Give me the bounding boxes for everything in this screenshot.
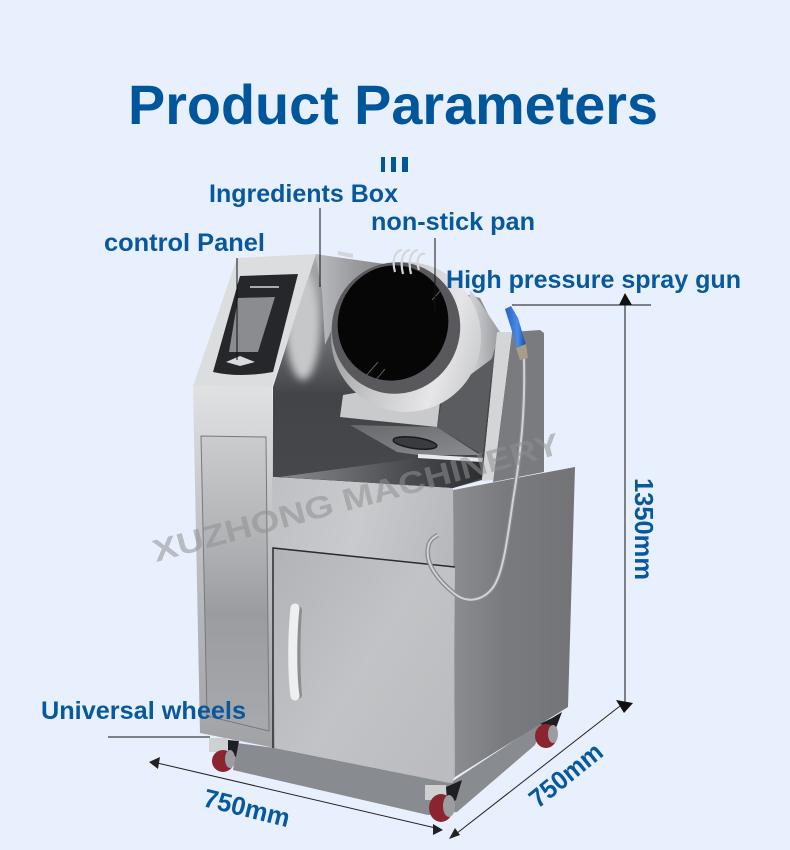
base front face <box>272 387 455 783</box>
dimension: height: 1350mm <box>629 478 659 580</box>
leader: control panel <box>236 258 238 360</box>
floor shadow <box>233 720 545 815</box>
panel small text <box>250 286 279 288</box>
machine interior back wall <box>273 254 497 488</box>
rear drum highlight <box>286 270 320 380</box>
leader: non-stick pan <box>434 238 436 312</box>
label: ingredients box: Ingredients Box <box>209 180 398 208</box>
basin <box>280 458 482 488</box>
side wall light strip <box>482 332 512 481</box>
dimension: depth: 750mm <box>523 736 609 814</box>
display screen <box>229 297 275 352</box>
white rod <box>418 454 483 462</box>
pan mount bracket <box>340 385 440 427</box>
gun fitting <box>516 344 528 360</box>
side wall dark panel <box>493 330 544 482</box>
icon: three bars <box>381 157 408 172</box>
pan inner marks <box>365 290 441 381</box>
pan outer shell <box>331 262 481 412</box>
front door <box>273 548 455 783</box>
leader: spray gun <box>512 304 651 306</box>
pan interior <box>321 250 465 396</box>
leader: universal wheels <box>108 736 210 738</box>
product illustration: cooking machine <box>193 244 575 822</box>
spray gun <box>505 306 526 349</box>
arrow: depth dimension <box>449 706 620 839</box>
label: non-stick pan: non-stick pan <box>371 208 535 236</box>
panel logo <box>226 356 255 366</box>
right mount shade <box>437 358 493 455</box>
oil pipes <box>394 250 425 274</box>
left inset panel <box>201 436 269 731</box>
arrow: height dimension <box>616 293 633 713</box>
wheel front left <box>209 738 239 772</box>
left column <box>193 386 275 748</box>
hood top <box>315 254 385 345</box>
wheel rear right <box>535 712 562 748</box>
label: spray gun: High pressure spray gun <box>446 266 741 294</box>
control panel face <box>193 254 316 387</box>
door handle <box>293 608 298 696</box>
title: Product Parameters <box>128 73 658 136</box>
label: control panel: control Panel <box>104 229 265 257</box>
fan block <box>350 425 480 455</box>
pan rim <box>313 244 479 412</box>
watermark: XUZHONG MACHINERY <box>149 426 564 569</box>
hose <box>428 358 524 600</box>
leader: ingredients box <box>319 208 321 287</box>
arrow: width dimension <box>149 757 443 835</box>
control panel dark surround <box>213 274 298 375</box>
base side face <box>453 467 575 777</box>
wheel front centre <box>425 780 462 822</box>
label: universal wheels: Universal wheels <box>41 697 246 725</box>
dimension: width: 750mm <box>201 783 293 833</box>
hood tab <box>338 251 353 258</box>
right drum tail <box>465 290 500 395</box>
fan vent <box>392 434 438 452</box>
